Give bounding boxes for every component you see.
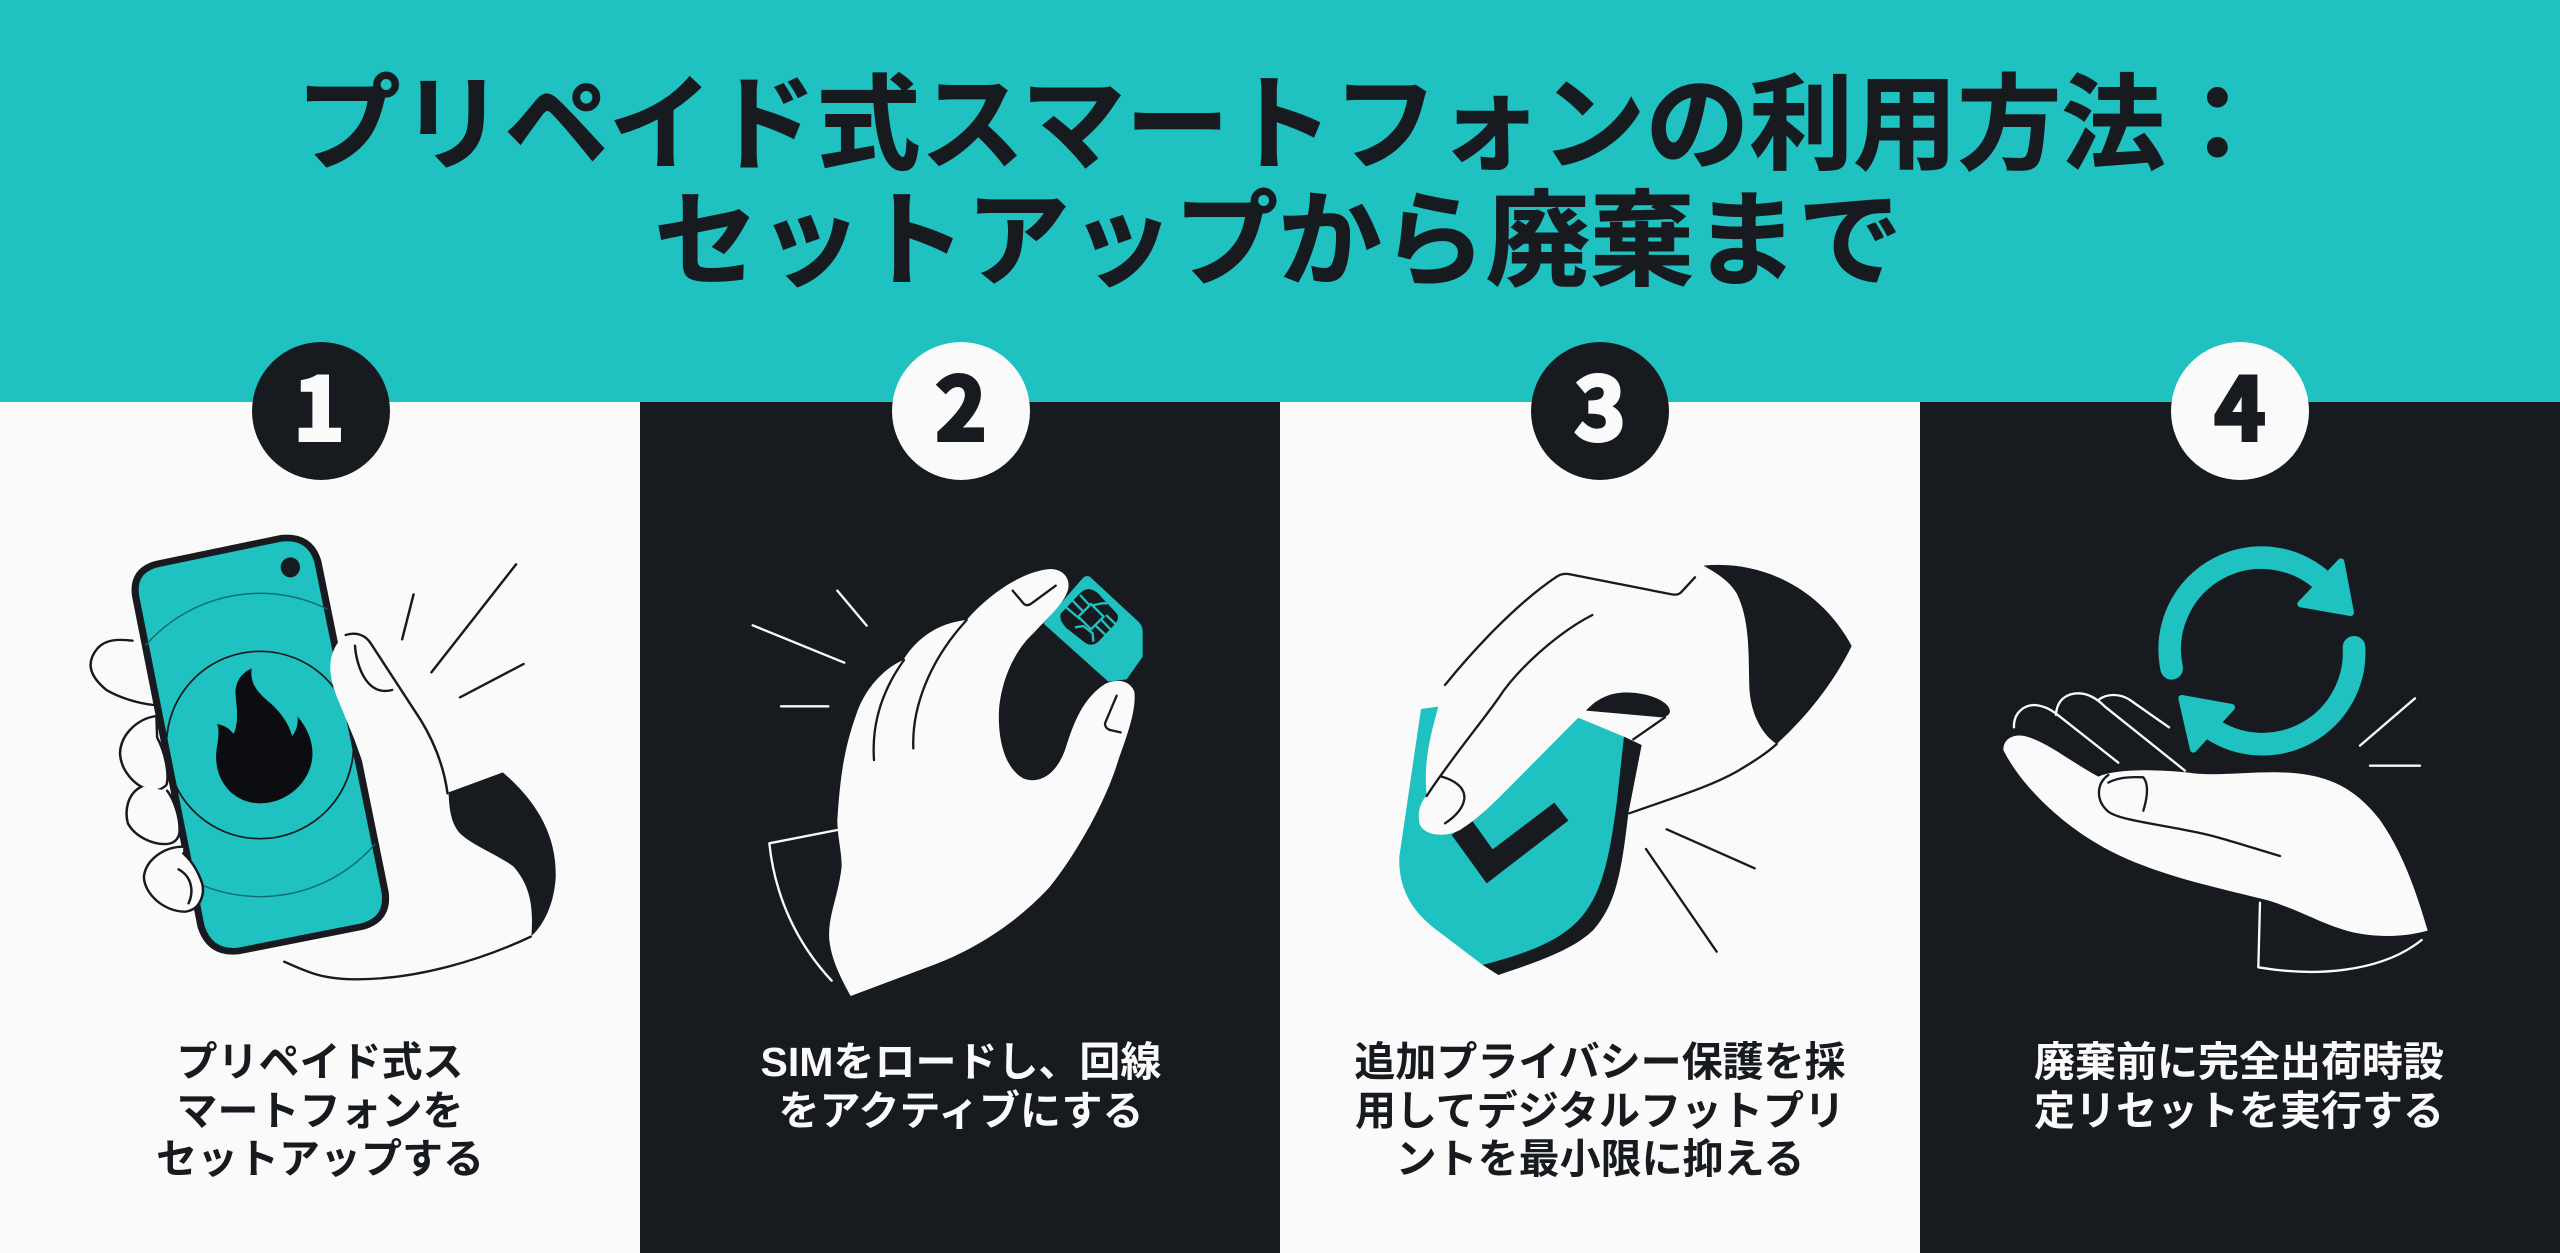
icon: hand holding phone with flame xyxy=(91,538,556,979)
finger 2 xyxy=(120,716,167,791)
step 4 caption: 定リセットを実行する xyxy=(2034,1088,2444,1134)
step number 1 xyxy=(252,340,390,480)
hand xyxy=(829,569,1135,996)
finger crease xyxy=(1427,615,1592,796)
burst lines xyxy=(402,564,524,697)
step 1 caption xyxy=(156,1039,484,1182)
header band xyxy=(0,0,2560,402)
finger nail xyxy=(1442,777,1464,823)
thumb nail xyxy=(355,646,392,691)
step 3 caption: 追加プライバシー保護を採 xyxy=(1354,1039,1846,1085)
icon: hand holding SIM card xyxy=(753,569,1143,996)
wrist line xyxy=(1629,744,1777,813)
burst lines xyxy=(2360,698,2420,766)
step number 4: 4 xyxy=(2215,340,2265,465)
step number 4 xyxy=(2171,340,2309,480)
title: セットアップから廃棄まで xyxy=(654,184,1902,300)
reset arrows xyxy=(2170,558,2354,749)
step number 2 xyxy=(892,340,1030,480)
signal rings xyxy=(145,592,376,898)
step number 3: 3 xyxy=(1575,340,1625,465)
shield xyxy=(1399,707,1624,965)
shield shadow xyxy=(1483,737,1642,975)
step 4 caption xyxy=(2034,1039,2444,1134)
step 1 caption: プリペイド式ス xyxy=(176,1039,464,1085)
sleeve outline xyxy=(769,830,837,981)
burst lines xyxy=(753,591,867,706)
palm xyxy=(2003,735,2428,936)
step 3 caption: 用してデジタルフットプリ xyxy=(1355,1088,1845,1134)
panel: step 4 background xyxy=(1920,400,2560,1253)
thumb line xyxy=(1633,717,1665,739)
sleeve xyxy=(1703,565,1852,744)
background fingers xyxy=(2014,693,2185,771)
thumb nail xyxy=(1105,696,1121,732)
step 2 caption xyxy=(761,1039,1161,1134)
step 2 caption: SIMをロードし、回線 xyxy=(761,1039,1161,1085)
thumb outline xyxy=(2099,775,2280,856)
icon: open hand with reset arrows xyxy=(2003,558,2428,972)
hand top outline xyxy=(1445,574,1695,685)
step number 2: 2 xyxy=(936,340,986,465)
thumb nail xyxy=(1586,693,1670,717)
wrist line xyxy=(284,937,531,979)
check mark xyxy=(1452,803,1568,883)
sleeve xyxy=(449,772,556,936)
index nail xyxy=(1013,586,1056,605)
hand mask xyxy=(1419,620,1627,835)
icon: hand holding shield with check xyxy=(1399,565,1852,975)
thumb mask xyxy=(330,633,453,780)
step 1 caption: マートフォンを xyxy=(176,1088,464,1134)
panel: step 2 background xyxy=(640,400,1280,1253)
SIM chip xyxy=(1060,589,1118,645)
finger 3 xyxy=(127,787,180,844)
finger 4 nail xyxy=(179,869,191,903)
flame xyxy=(216,668,312,803)
panel: step 3 background xyxy=(1280,400,1920,1253)
finger creases xyxy=(874,620,967,760)
SIM chip contacts xyxy=(1066,595,1117,642)
phone body xyxy=(135,538,386,951)
panel: step 1 background xyxy=(0,400,640,1253)
phone camera xyxy=(281,557,300,577)
SIM card xyxy=(1043,576,1143,682)
step number 1: 1 xyxy=(294,340,344,465)
step 3 caption: ントを最小限に抑える xyxy=(1396,1136,1804,1182)
step 1 caption: セットアップする xyxy=(156,1136,484,1182)
burst lines xyxy=(1646,829,1755,952)
title: プリペイド式スマートフォンの利用方法： xyxy=(297,68,2269,184)
title xyxy=(297,68,2269,300)
finger 1 xyxy=(91,640,154,705)
step 3 caption xyxy=(1354,1039,1846,1182)
thumb outline xyxy=(346,634,447,793)
step 2 caption: をアクティブにする xyxy=(779,1088,1143,1134)
sleeve outline xyxy=(2258,903,2422,972)
finger 4 xyxy=(144,847,203,912)
thumb nail xyxy=(2108,777,2147,811)
step number 3 xyxy=(1531,340,1669,480)
step 4 caption: 廃棄前に完全出荷時設 xyxy=(2034,1039,2444,1085)
